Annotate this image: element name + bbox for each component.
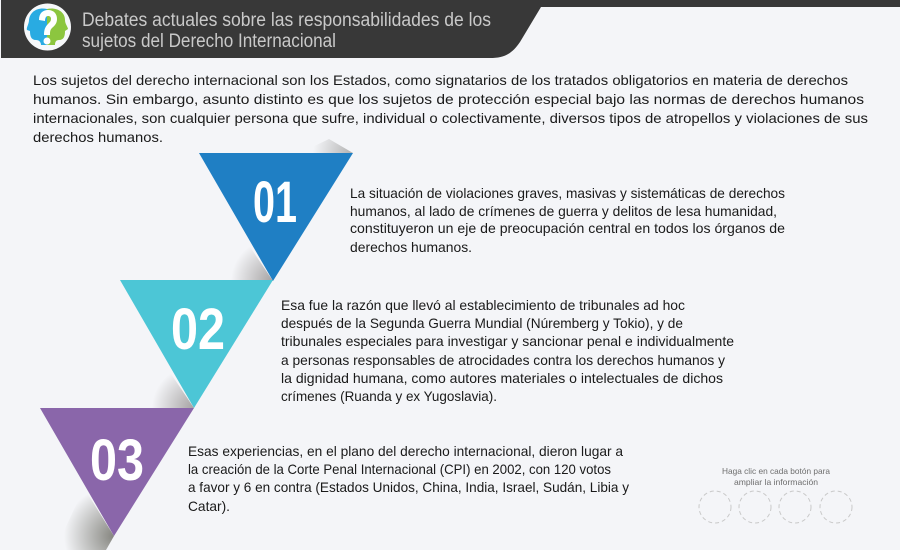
icon: two heads with question mark [24,4,71,50]
step 03 text: Esas experiencias, en el plano del derecho internacional, dieron lugar a [188,443,623,459]
intro text [33,72,868,145]
step 02 text: a personas responsables de atrocidades contra los derechos humanos y [281,352,725,368]
step 03 triangle: 03 [90,428,144,493]
step 02 text: Esa fue la razón que llevó al establecimiento de tribunales ad hoc [281,297,685,313]
step 03 text: Catar). [188,498,230,514]
intro text: derechos humanos. [33,129,163,145]
navigation buttons [699,491,852,523]
step 01 text: constituyeron un eje de preocupación central en todos los órganos de [350,220,785,236]
step 01 text: humanos, al lado de crímenes de guerra y delitos de lesa humanidad, [350,203,777,219]
intro text: Los sujetos del derecho internacional son los Estados, como signatarios de los tratados obligatorios en materia de derechos [33,72,848,88]
click instruction: ampliar la información [734,477,818,487]
step 02 text: crímenes (Ruanda y ex Yugoslavia). [281,388,497,404]
step 03 text: a favor y 6 en contra (Estados Unidos, China, India, Israel, Sudán, Libia y [188,479,629,495]
step 01 triangle: 01 [253,170,297,235]
intro text: internacionales, son cualquier persona que sufre, individual o colectivamente, diversos tipos de atropellos y violaciones de sus [33,110,868,126]
step 03 triangle [40,408,194,536]
step 02 text: la dignidad humana, como autores materiales o intelectuales de dichos [281,370,723,386]
step 02 triangle: 02 [171,297,225,362]
title: Debates actuales sobre las responsabilidades de los [82,10,491,31]
intro text: humanos. Sin embargo, asunto distinto es que los sujetos de protección especial bajo las normas de derechos humanos [33,91,864,107]
step 01 triangle [199,153,353,281]
step 01 text [350,185,785,255]
header band [1,0,900,58]
step 02 text: después de la Segunda Guerra Mundial (Núremberg y Tokio), y de [281,315,683,331]
click instruction: Haga clic en cada botón para [722,466,830,476]
title [82,10,491,52]
icon dot [44,38,50,44]
step 02 text [281,297,734,404]
title: sujetos del Derecho Internacional [82,31,336,52]
step 02 text: tribunales especiales para investigar y sancionar penal e individualmente [281,333,734,349]
step 01 text: derechos humanos. [350,239,472,255]
step 03 text [188,443,629,514]
step 02 triangle [120,280,273,408]
click instruction [722,466,830,487]
step 01 text: La situación de violaciones graves, masivas y sistemáticas de derechos [350,185,785,201]
fold shadows [55,139,353,550]
step 03 text: la creación de la Corte Penal Internacional (CPI) en 2002, con 120 votos [188,461,611,477]
